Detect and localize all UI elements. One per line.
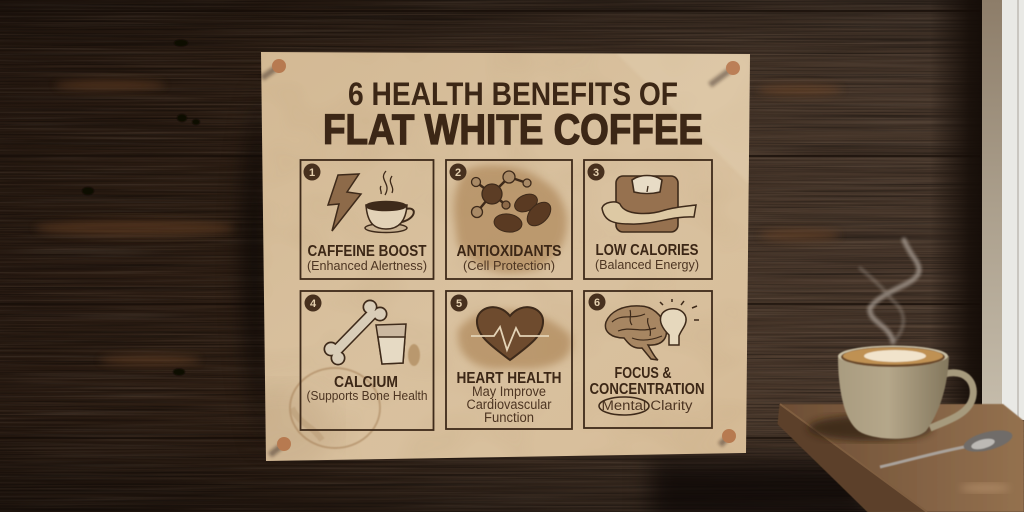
- icon: brain: [605, 306, 666, 360]
- sub label: (Enhanced Alertness): [307, 258, 427, 273]
- panel 1: caffeine boost: [300, 160, 434, 279]
- sub label: (Balanced Energy): [595, 257, 699, 272]
- badge 3: 3: [593, 167, 599, 179]
- icon: measuring tape: [602, 202, 696, 224]
- panel 2: antioxidants: [446, 160, 572, 279]
- icon: scale: [616, 176, 678, 232]
- paper poster: [261, 52, 750, 461]
- badge 6: 6: [594, 297, 600, 309]
- sub label: (Supports Bone Health: [306, 388, 428, 403]
- copper pins: [262, 59, 740, 455]
- sub label: [466, 384, 552, 425]
- sub label: Function: [484, 410, 534, 425]
- panel 6: focus and concentration: [584, 291, 712, 428]
- sub label: Cardiovascular: [466, 397, 552, 412]
- panel 4: calcium: [300, 291, 434, 430]
- label: HEART HEALTH: [456, 370, 562, 387]
- label: ANTIOXIDANTS: [456, 243, 562, 260]
- icon: bone: [324, 300, 388, 366]
- window frame: [982, 0, 1024, 420]
- label: LOW CALORIES: [596, 242, 699, 259]
- coffee cup: [838, 346, 973, 439]
- label: FOCUS &: [614, 365, 672, 382]
- badge 1: 1: [309, 167, 315, 179]
- sub label: Mental Clarity: [602, 398, 693, 413]
- title: [323, 76, 703, 154]
- steam: [860, 240, 919, 342]
- icon: coffee beans: [493, 191, 555, 234]
- label: CAFFEINE BOOST: [308, 243, 427, 260]
- label: CALCIUM: [334, 374, 398, 391]
- icon: molecule: [472, 171, 531, 218]
- title: 6 HEALTH BENEFITS OF: [348, 76, 678, 112]
- sub label: (Cell Protection): [463, 258, 555, 273]
- icon: lightning bolt: [328, 174, 361, 231]
- panel 5: heart health: [446, 291, 572, 429]
- icon: light bulb: [660, 299, 699, 345]
- badge 4: 4: [310, 298, 317, 310]
- sub label: May Improve: [472, 384, 546, 399]
- title: FLAT WHITE COFFEE: [323, 106, 703, 154]
- icon: heart with pulse: [471, 307, 549, 360]
- label: CONCENTRATION: [590, 381, 704, 398]
- badge 5: 5: [456, 298, 462, 310]
- badge 2: 2: [455, 167, 461, 179]
- panel 3: low calories: [584, 160, 712, 279]
- spoon: [880, 426, 1014, 467]
- icon: glass of milk: [376, 324, 406, 364]
- wooden shelf: [778, 404, 1024, 512]
- icon: coffee cup: [365, 171, 414, 232]
- label: [590, 365, 704, 398]
